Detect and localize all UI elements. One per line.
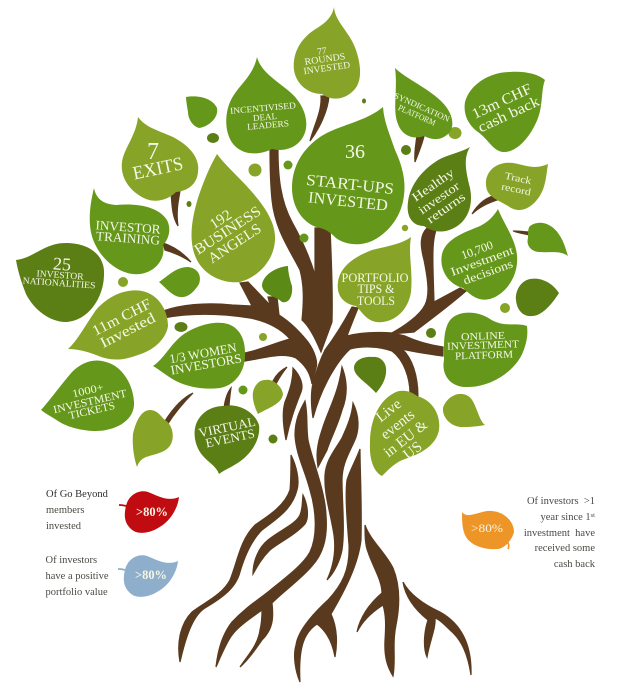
leaf: healthy investor returns: Healthy <box>409 165 457 204</box>
leaf: portfolio tips and tools <box>338 237 411 322</box>
text: Of Go Beyond members invested: invested <box>46 521 82 532</box>
leaf: 10,700 investment decisions: Investment <box>449 243 516 279</box>
leaf: 11m CHF invested: 11m CHF <box>90 296 154 340</box>
leaf: healthy investor returns: investor <box>416 178 463 217</box>
leaf: 25 investor nationalities: NATIONALITIES <box>22 276 96 292</box>
icon: orange leaf >80% <box>462 511 514 549</box>
leaf: live events in EU and US: events <box>378 407 418 443</box>
tree trunk, branches and roots <box>163 96 530 682</box>
text: Of investors have a positive portfolio value: Of investors <box>46 555 97 566</box>
leaf: small olive right <box>443 394 485 427</box>
leaf: incentivised deal leaders: DEAL <box>253 111 277 123</box>
leaf: 13m CHF cash back: 13m CHF <box>470 81 534 123</box>
leaf: 36 start-ups invested: 36 <box>345 141 365 163</box>
leaf: investor training: TRAINING <box>96 228 160 248</box>
leaf: healthy investor returns <box>408 147 471 232</box>
leaf: online investment platform <box>443 313 527 387</box>
text: investors over 1 year cash back: cash back <box>554 559 596 570</box>
text: Of investors have a positive portfolio value: portfolio value <box>46 587 108 598</box>
leaf: virtual events: VIRTUAL <box>197 414 257 440</box>
leaf: 1000+ investment tickets: TICKETS <box>68 400 116 422</box>
text: investors over 1 year cash back: investment have <box>524 528 595 539</box>
leaf: 36 start-ups invested: INVESTED <box>307 189 389 215</box>
leaf: portfolio tips and tools: TOOLS <box>357 294 395 308</box>
text: Of Go Beyond members invested: Of Go Beyond <box>46 489 109 500</box>
leaf: 7 exits: 7 <box>147 139 159 165</box>
leaf: 192 business angels: 192 <box>207 207 235 233</box>
leaf: 36 start-ups invested: START-UPS <box>305 172 395 198</box>
leaf: 1000+ investment tickets: 1000+ <box>71 382 105 400</box>
leaf: investor training <box>90 188 169 274</box>
leaf: track record: Track <box>504 171 532 187</box>
leaf: 25 investor nationalities <box>16 243 104 322</box>
leaf: 7 exits: EXITS <box>131 153 185 185</box>
leaf: 1000+ investment tickets <box>41 360 134 431</box>
leaf: 13m CHF cash back <box>465 72 545 152</box>
leaf: 1/3 women investors: INVESTORS <box>169 350 243 378</box>
leaf: 1000+ investment tickets: INVESTMENT <box>52 388 128 416</box>
leaf: incentivised deal leaders: INCENTIVISED <box>230 100 297 116</box>
leaf: small dark center <box>354 357 386 393</box>
leaf: 1/3 women investors: 1/3 WOMEN <box>168 340 238 366</box>
leaf: small green center-left <box>159 267 200 297</box>
icon: red leaf >80% <box>119 491 179 533</box>
leaf: syndication platform: SYNDICATION <box>393 90 451 124</box>
leaf: small olive near virtual events <box>253 380 283 414</box>
leaf: 77 rounds invested: 77 <box>317 46 328 58</box>
leaf: syndication platform <box>393 68 452 139</box>
text: Of Go Beyond members invested <box>46 489 109 532</box>
leaf: 77 rounds invested: ROUNDS <box>304 52 346 68</box>
leaf: small green top <box>186 96 217 128</box>
leaf: small green right <box>528 223 568 256</box>
text: investors over 1 year cash back: st <box>591 512 595 519</box>
leaf: 192 business angels: BUSINESS <box>192 204 264 258</box>
text: Of investors have a positive portfolio value: have a positive <box>46 571 109 582</box>
text: Of Go Beyond members invested: members <box>46 505 84 516</box>
leaf: 25 investor nationalities: INVESTOR <box>36 269 84 283</box>
leaf: online investment platform: PLATFORM <box>455 349 514 363</box>
leaf: 77 rounds invested <box>294 7 360 99</box>
icon: blue leaf >80%: >80% <box>135 568 167 582</box>
leaf: portfolio tips and tools: TIPS & <box>358 282 395 296</box>
icon: red leaf >80%: >80% <box>136 505 168 519</box>
leaf: investor training: INVESTOR <box>95 217 161 237</box>
leaf: syndication platform: PLATFORM <box>397 102 438 128</box>
leaf: live events in EU and US: Live <box>373 396 405 426</box>
leaf: 10,700 investment decisions: 10,700 <box>459 238 495 262</box>
leaf: incentivised deal leaders <box>226 57 306 153</box>
decorative dots <box>118 98 510 444</box>
leaf: 1/3 women investors <box>153 323 245 389</box>
icon: blue leaf >80% <box>118 555 178 597</box>
leaf: online investment platform: INVESTMENT <box>447 339 520 353</box>
leaf: 7 exits <box>122 117 198 201</box>
leaf: small dark right <box>516 279 559 316</box>
leaf: 11m CHF invested: Invested <box>98 310 159 352</box>
leaf: 11m CHF invested <box>68 290 168 360</box>
leaf: virtual events: EVENTS <box>204 425 256 451</box>
leaf: 25 investor nationalities: 25 <box>52 253 72 275</box>
text: investors over 1 year cash back: year since 1 <box>540 512 591 523</box>
icon: orange leaf >80%: >80% <box>471 521 503 535</box>
leaf: 36 start-ups invested <box>292 107 405 244</box>
leaf: live events in EU and US: in EU & <box>381 417 431 461</box>
leaf: 77 rounds invested: INVESTED <box>303 61 351 77</box>
leaf: 10,700 investment decisions: decisions <box>461 256 515 287</box>
leaf: track record: record <box>500 182 532 198</box>
leaf: 192 business angels <box>192 154 275 282</box>
leaf: 10,700 investment decisions <box>441 209 517 300</box>
text: investors over 1 year cash back: received some <box>535 543 595 554</box>
leaf: virtual events <box>195 405 259 474</box>
leaf: 192 business angels: ANGELS <box>205 221 265 267</box>
leaf: live events in EU and US: US <box>401 439 425 463</box>
leaf: incentivised deal leaders: LEADERS <box>247 118 289 132</box>
leaf: 13m CHF cash back: cash back <box>476 94 543 136</box>
text: Of investors have a positive portfolio value <box>46 555 109 598</box>
text: investors over 1 year cash back <box>524 496 596 570</box>
text: investors over 1 year cash back: Of investors >1 <box>527 496 595 507</box>
leaf: track record <box>486 163 548 210</box>
leaf: small olive bottom-left <box>133 410 173 467</box>
leaf: live events in EU and US <box>370 391 439 476</box>
leaf: healthy investor returns: returns <box>424 190 468 226</box>
leaf: small dark near trunk <box>262 266 292 302</box>
leaf: portfolio tips and tools: PORTFOLIO <box>342 271 408 285</box>
leaf: online investment platform: ONLINE <box>461 331 505 343</box>
